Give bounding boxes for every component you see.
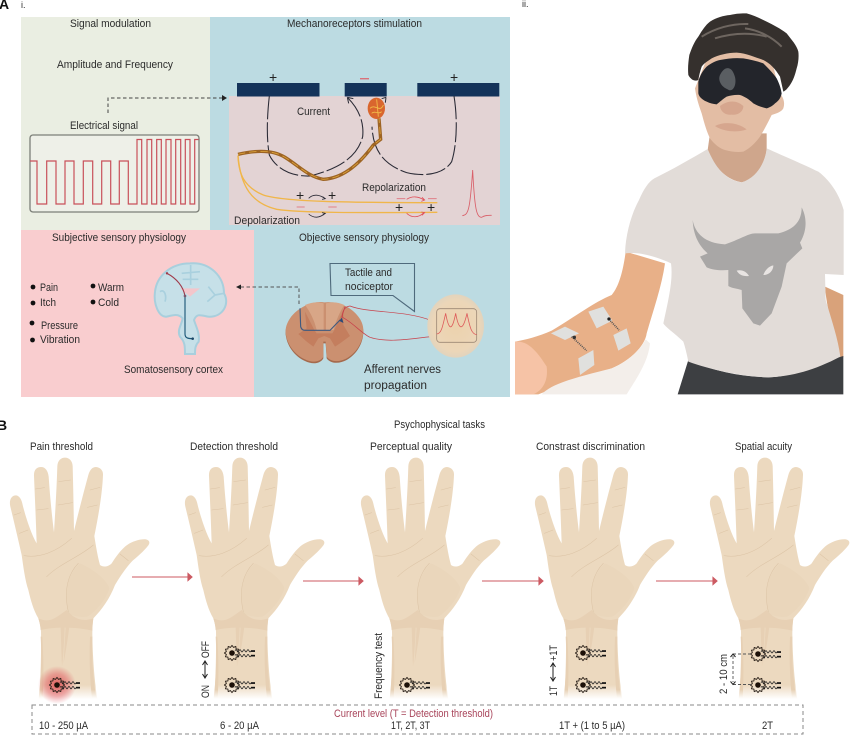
text: repolarization: Repolarization <box>362 182 426 194</box>
label: on off toggle: OFF <box>200 641 212 658</box>
column: detection threshold: Detection threshold <box>190 441 278 453</box>
label: on off toggle <box>200 641 212 698</box>
label: frequency test: Frequency test <box>373 633 385 699</box>
nose and lips <box>715 101 747 131</box>
heading: current level: Current level (T = Detection threshold) <box>334 708 493 720</box>
list: sensations: Pressure <box>41 320 78 332</box>
electrode polarity signs: + <box>450 69 458 85</box>
label: 2 to 10 cm spacing <box>718 654 751 694</box>
current level box <box>32 705 803 734</box>
panel: signal modulation <box>21 17 211 231</box>
column: spatial acuity <box>710 441 849 699</box>
text: current: Current <box>297 106 330 118</box>
text: amplitude and frequency: Amplitude and Frequency <box>57 59 173 71</box>
value: pain: 10 - 250 µA <box>39 720 89 732</box>
electrode polarity signs: + <box>269 69 277 85</box>
column: constrast discrimination: Constrast discrimination <box>536 441 645 453</box>
neck <box>708 133 767 182</box>
blindfold <box>698 58 782 108</box>
label: 2 to 10 cm spacing: 2 - 10 cm <box>718 654 730 694</box>
callout: tactile and nociceptor <box>330 264 414 312</box>
icon: hand with painful sensor <box>10 458 149 704</box>
electrode polarity signs <box>269 69 458 85</box>
icon: hand with two contrast sensors <box>535 458 674 699</box>
blindfold highlight <box>719 68 735 90</box>
icon: brain <box>155 263 226 354</box>
list: sensations <box>30 282 124 346</box>
icon: hand with spaced sensors <box>710 458 849 699</box>
charge signs along axon: + <box>395 199 403 215</box>
column: spatial acuity: Spatial acuity <box>735 441 792 453</box>
text: depolarization: Depolarization <box>234 215 300 227</box>
column: perceptual quality: Perceptual quality <box>370 441 452 453</box>
value: spatial: 2T <box>762 720 773 732</box>
shirt bull logo <box>693 207 806 326</box>
forearm patches and sensor <box>551 307 631 375</box>
column: perceptual quality <box>361 441 500 699</box>
callout: tactile and nociceptor: Tactile and <box>345 267 392 279</box>
list: sensations: Itch <box>40 297 56 309</box>
callout: tactile and nociceptor: nociceptor <box>345 281 393 293</box>
arrow: spinal cord to brain <box>236 284 299 304</box>
list: sensations: Cold <box>98 297 119 309</box>
electrodes <box>237 83 499 96</box>
icon: hand with two sensors <box>185 458 324 699</box>
arrow: pain to detection <box>132 574 192 580</box>
face <box>695 47 784 152</box>
right arm <box>825 287 843 357</box>
list: sensations: Pain <box>40 282 58 294</box>
hair highlights <box>702 24 782 47</box>
label: 1T and plus 1T: 1T <box>548 686 560 696</box>
logo eyes <box>737 265 773 276</box>
heading: objective sensory physiology: Objective sensory physiology <box>299 232 429 244</box>
hair <box>688 13 799 92</box>
column: constrast discrimination <box>535 441 674 699</box>
charge signs along axon: + <box>296 187 304 203</box>
charge signs along axon <box>296 187 435 215</box>
label: on off toggle: ON <box>200 685 212 698</box>
list: sensations: Vibration <box>40 334 80 346</box>
panel: subjective sensory physiology <box>21 230 254 397</box>
column: pain threshold <box>10 441 149 704</box>
text: electrical signal: Electrical signal <box>70 120 138 132</box>
current paths and nerve fibers <box>238 96 492 217</box>
chart: electrical signal waveform <box>30 135 199 212</box>
icon: spinal cord cross-section <box>286 294 484 363</box>
charge signs along axon: + <box>328 187 336 203</box>
arrow: perceptual to constrast <box>482 578 543 584</box>
label: afferent nerves propagation <box>364 364 441 392</box>
label: 1T and plus 1T: +1T <box>548 645 560 661</box>
arrow: signal to electrodes <box>108 95 227 113</box>
label: 1T and plus 1T <box>548 645 560 696</box>
label: somatosensory cortex: Somatosensory cortex <box>124 364 223 376</box>
white cloth <box>542 339 650 394</box>
label: afferent nerves propagation: propagation <box>364 380 427 392</box>
panel: mechanoreceptors stimulation <box>210 17 510 231</box>
skin tissue block <box>229 96 500 225</box>
heading: subjective sensory physiology: Subjective sensory physiology <box>52 232 186 244</box>
icon: hand with frequency sensor <box>361 458 500 699</box>
heading: signal modulation: Signal modulation <box>70 18 151 30</box>
panel: objective sensory physiology <box>254 230 510 397</box>
value: perceptual: 1T, 2T, 3T <box>391 720 430 732</box>
T-shirt <box>625 148 844 377</box>
charge signs along axon: + <box>427 199 435 215</box>
sub-panel label i: i. <box>21 0 26 10</box>
value: constrast: 1T + (1 to 5 µA) <box>559 720 625 732</box>
arrow: detection to perceptual <box>303 578 363 584</box>
list: sensations: Warm <box>98 282 124 294</box>
heading: mechanoreceptors stimulation: Mechanoreceptors stimulation <box>287 18 422 30</box>
arrow: constrast to spatial <box>656 578 717 584</box>
value: detection: 6 - 20 µA <box>220 720 260 732</box>
column: pain threshold: Pain threshold <box>30 441 93 453</box>
photo: participant with blindfold and forearm electrodes <box>515 13 844 394</box>
trousers <box>678 356 843 394</box>
heading: psychophysical tasks: Psychophysical tasks <box>394 419 485 431</box>
outstretched left arm <box>515 252 665 394</box>
column: detection threshold <box>185 441 324 699</box>
label: afferent nerves propagation: Afferent nerves <box>364 364 441 376</box>
